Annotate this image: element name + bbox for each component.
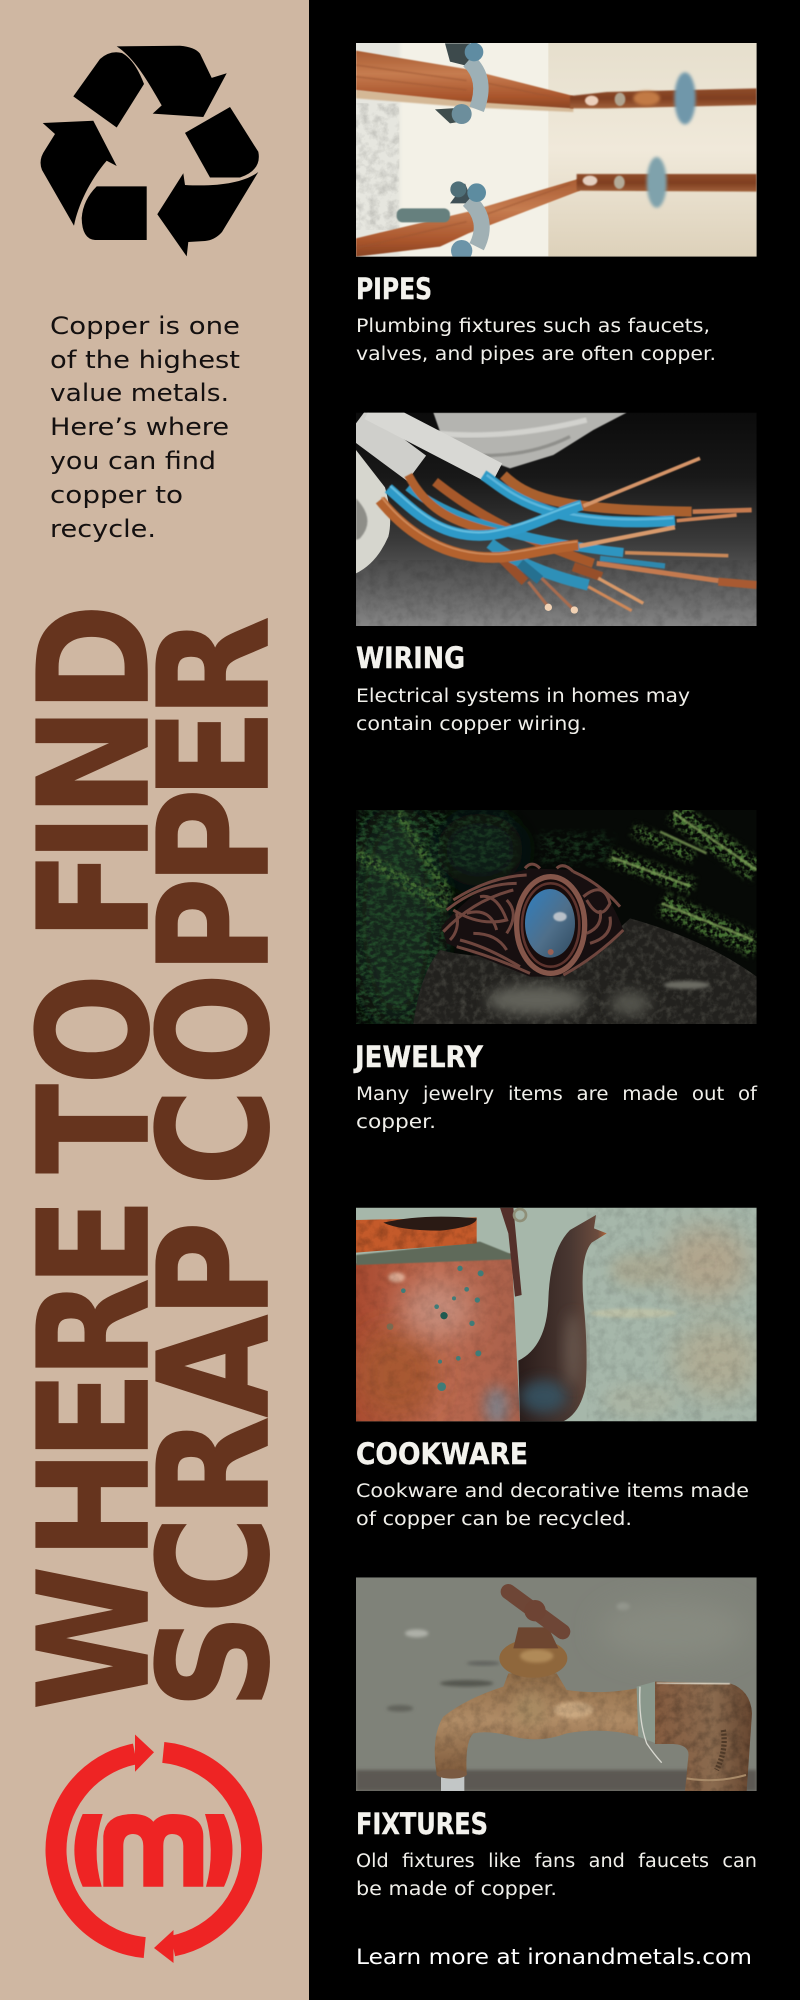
text: introduction	[50, 312, 240, 543]
text: pipes description: valves, and pipes are often copper.	[356, 344, 716, 365]
text: website call to action: Learn more at ironandmetals.com	[356, 1945, 752, 1970]
image: copper and blue electrical wires	[356, 408, 757, 626]
text: pipes description: Plumbing fixtures such as faucets,	[356, 316, 710, 337]
text: fixtures description: be made of copper.	[356, 1879, 557, 1900]
text: wiring description	[356, 686, 690, 735]
text: introduction: Here’s where	[50, 413, 229, 441]
image: weathered copper kettle	[356, 1208, 760, 1427]
text: fixtures description	[356, 1851, 757, 1900]
text: introduction: recycle.	[50, 515, 156, 543]
text: fixtures description: Old fixtures like fans and faucets can	[356, 1851, 757, 1872]
text: introduction: of the highest	[50, 346, 240, 374]
heading: cookware: COOKWARE	[356, 1437, 528, 1471]
text: introduction: copper to	[50, 481, 183, 509]
image: copper wire bracelet on a rock	[350, 810, 757, 1024]
image: old brass faucet	[356, 1577, 757, 1791]
text: cookware description: of copper can be recycled.	[356, 1509, 632, 1530]
title: where to find scrap copper: SCRAP COPPER	[126, 616, 303, 1709]
panel: left tan column	[0, 0, 309, 2000]
text: jewelry description: Many jewelry items are made out of	[356, 1084, 758, 1105]
heading: fixtures: FIXTURES	[356, 1807, 488, 1841]
icon: recycling symbol	[41, 46, 259, 256]
title: where to find scrap copper	[7, 604, 303, 1710]
text: wiring description: contain copper wiring.	[356, 714, 587, 735]
heading: jewelry: JEWELRY	[353, 1040, 484, 1074]
text: cookware description: Cookware and decorative items made	[356, 1481, 749, 1502]
text: jewelry description: copper.	[356, 1112, 436, 1133]
text: introduction: you can find	[50, 447, 216, 475]
text: pipes description	[356, 316, 716, 365]
image: copper pipes on a wall	[347, 37, 757, 263]
text: introduction: value metals.	[50, 379, 229, 407]
text: wiring description: Electrical systems in homes may	[356, 686, 690, 707]
heading: pipes: PIPES	[356, 272, 432, 306]
text: cookware description	[356, 1481, 749, 1530]
text: jewelry description	[356, 1084, 758, 1133]
icon: company logo with circular arrows	[56, 1734, 252, 1963]
text: introduction: Copper is one	[50, 312, 240, 340]
title: where to find scrap copper: WHERE TO FIND	[7, 604, 183, 1710]
heading: wiring: WIRING	[356, 641, 465, 675]
